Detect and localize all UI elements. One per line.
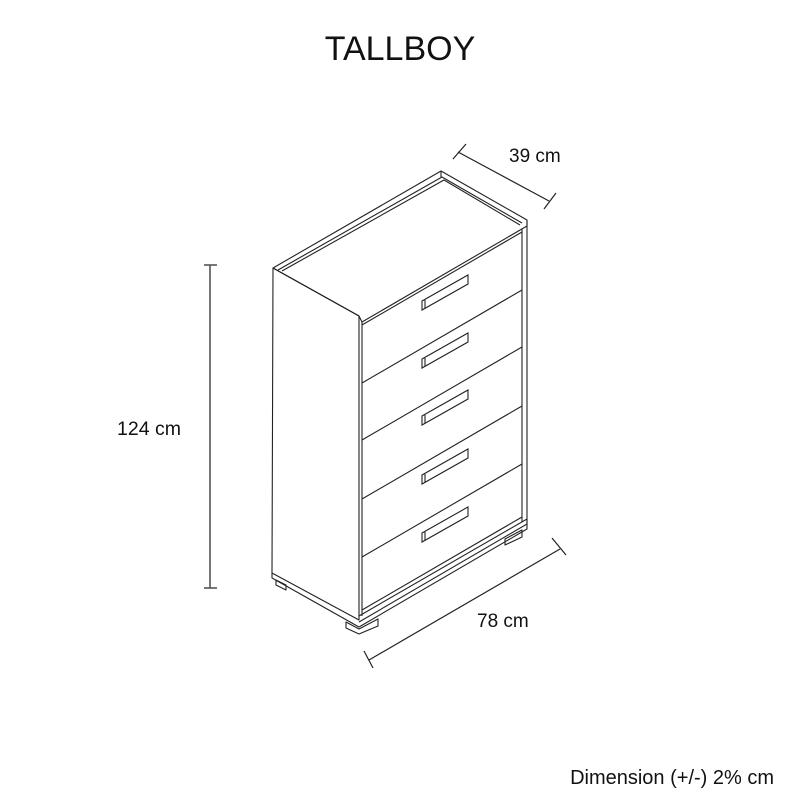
label: 39 cm: 39 cm xyxy=(509,146,561,167)
depth dimension xyxy=(453,144,556,209)
height dimension xyxy=(204,265,217,588)
top xyxy=(273,171,527,322)
tallboy drawing xyxy=(272,171,527,634)
drawer lines xyxy=(362,232,522,325)
label: 124 cm: 124 cm xyxy=(117,418,181,440)
left side panel xyxy=(272,268,359,620)
footer note: Dimension (+/-) 2% cm xyxy=(570,767,774,789)
feet xyxy=(276,580,286,590)
width dimension xyxy=(364,538,566,668)
label: 78 cm: 78 cm xyxy=(477,611,529,632)
plinth xyxy=(362,517,522,610)
right edge xyxy=(526,220,528,524)
title: TALLBOY xyxy=(325,30,475,68)
handles xyxy=(422,275,468,542)
